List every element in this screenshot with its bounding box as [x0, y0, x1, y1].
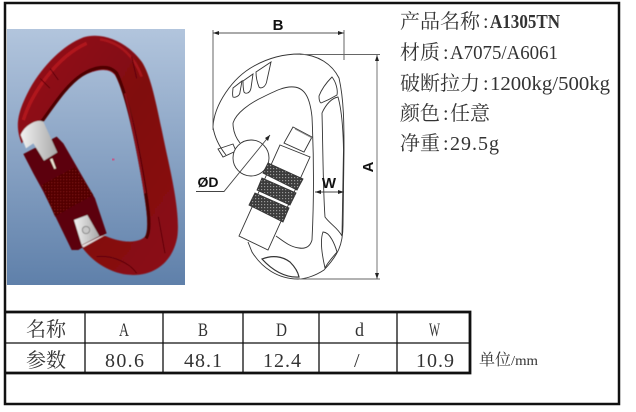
knurled bands — [249, 163, 303, 222]
knurled gate collar — [23, 137, 107, 250]
carabiner body — [18, 36, 178, 275]
spec: material: 材质 — [400, 41, 440, 64]
photo: red carabiner — [7, 29, 185, 285]
inner opening — [233, 87, 314, 248]
table header row: B — [198, 321, 208, 341]
gate pin — [50, 158, 56, 169]
spec: breaking strength: 1200kg/500kg — [490, 73, 610, 95]
unit note: 单位 — [479, 351, 511, 369]
spec: weight: 29.5g — [450, 133, 499, 155]
label W: W — [322, 175, 337, 192]
spec: colour: 任意 — [450, 102, 490, 125]
unit note: /mm — [511, 354, 538, 369]
dimension B — [213, 30, 344, 130]
label A: A — [360, 161, 377, 172]
product specs — [400, 10, 610, 155]
spec: colour: : — [443, 103, 449, 125]
spec: name — [400, 10, 560, 33]
table header row: d — [355, 321, 365, 341]
unit note — [479, 351, 538, 369]
table values row: 10.9 — [416, 350, 454, 372]
spec: name: : — [483, 11, 489, 33]
spec: material: : — [443, 42, 449, 64]
spec: colour — [400, 102, 490, 125]
table values row: 参数 — [26, 349, 66, 372]
gate body — [239, 145, 310, 250]
side slots — [322, 97, 344, 236]
small pink dot — [112, 158, 114, 160]
dimension W — [315, 190, 344, 194]
table header row — [26, 318, 440, 341]
table header row: D — [276, 321, 287, 341]
table values row: / — [354, 350, 360, 372]
spec: breaking strength: 破断拉力 — [400, 72, 480, 95]
silver gate base — [74, 215, 99, 245]
table header row: A — [119, 321, 129, 341]
spec: breaking strength — [400, 72, 610, 95]
spec: name: 产品名称 — [400, 10, 481, 33]
spec: weight: 净重 — [400, 132, 440, 155]
spec: name: A1305TN — [490, 11, 560, 33]
label ØD: ØD — [198, 174, 218, 190]
spec: weight — [400, 132, 499, 155]
table header row: 名称 — [26, 318, 67, 341]
dimension A — [300, 54, 380, 279]
parameter table — [5, 311, 470, 373]
spec: material — [400, 41, 558, 64]
table values row: 80.6 — [105, 350, 144, 372]
nose notch — [218, 144, 236, 157]
bottom slot — [322, 232, 337, 268]
carabiner outline — [213, 54, 344, 279]
table header row: W — [429, 321, 440, 341]
table values row — [26, 349, 454, 372]
spec: material: A7075/A6061 — [450, 42, 558, 64]
label B: B — [273, 17, 284, 34]
diameter circle — [233, 140, 269, 176]
silver gate sleeve — [21, 121, 57, 161]
technical drawing — [196, 30, 380, 279]
table values row: 12.4 — [263, 350, 301, 372]
spec: weight: : — [443, 133, 449, 155]
dimension D leader — [196, 135, 270, 192]
spec: colour: 颜色 — [400, 102, 440, 125]
spec: breaking strength: : — [483, 73, 489, 95]
table values row: 48.1 — [184, 350, 222, 372]
top ribs — [233, 62, 271, 97]
